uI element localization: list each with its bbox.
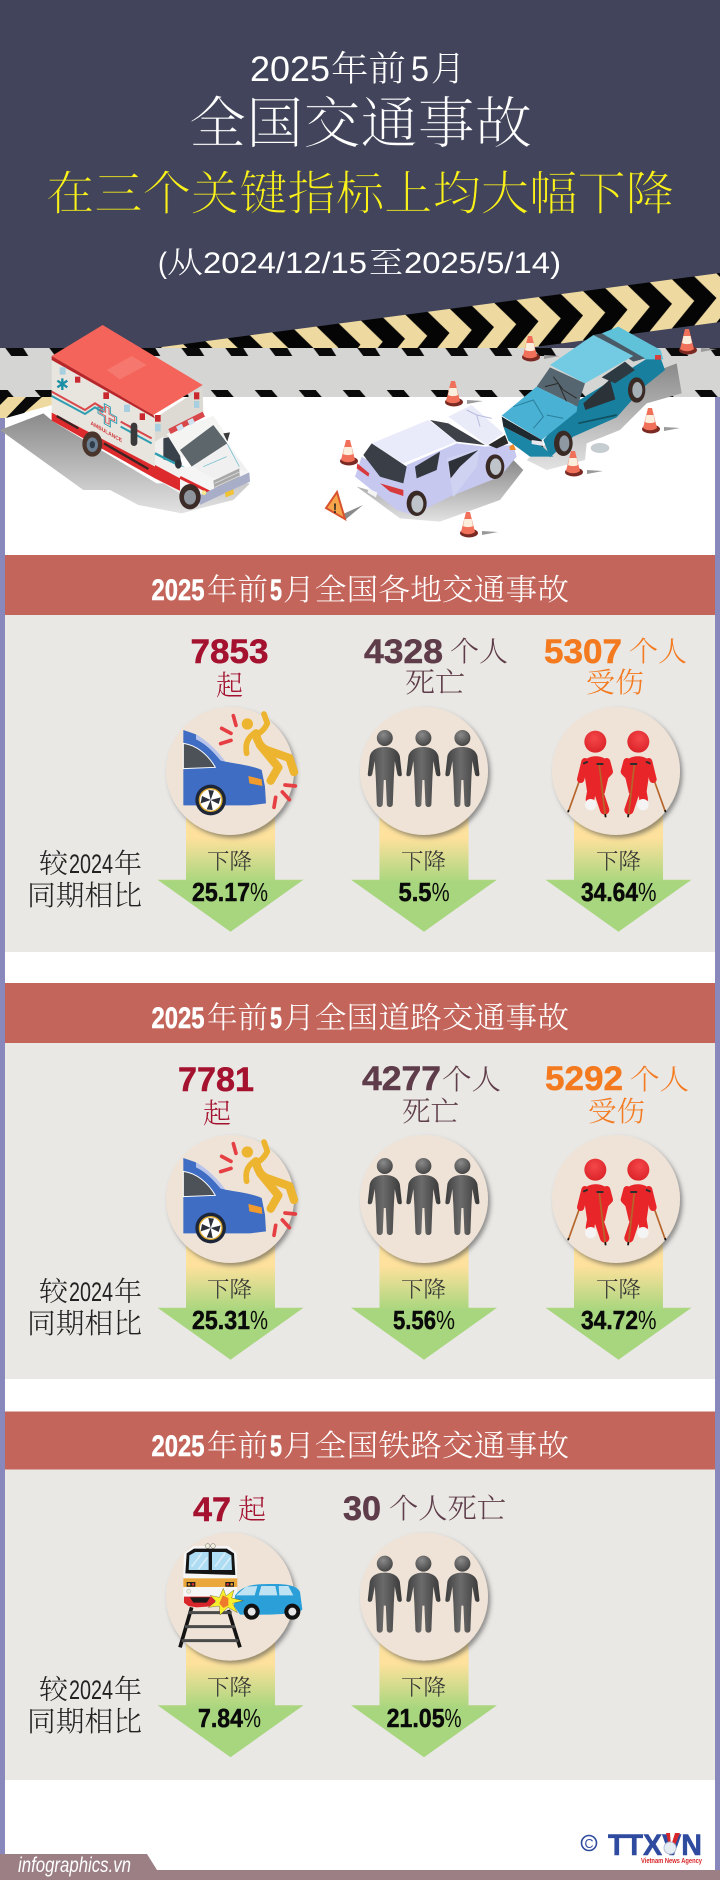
chevron warning band bbox=[147, 273, 720, 349]
panel background bbox=[5, 615, 715, 952]
section heading bar: 5 bbox=[270, 1002, 282, 1035]
title line: 2025年前5月: 年前 bbox=[331, 42, 406, 92]
comparison label: 2024 bbox=[69, 1675, 113, 1705]
comparison label: 年 bbox=[114, 842, 142, 881]
arrow: accidents down 7.84%: 7.84 bbox=[198, 1703, 243, 1733]
header background bbox=[0, 0, 720, 349]
stat: accidents 47: 47 bbox=[193, 1491, 231, 1529]
comparison label: 2024 bbox=[69, 849, 113, 879]
blue car bbox=[502, 327, 682, 470]
arrow: deaths down 21.05%: % bbox=[444, 1703, 462, 1733]
icon: train hitting car bbox=[166, 1533, 302, 1661]
arrow: deaths down 21.05%: 21.05 bbox=[387, 1703, 445, 1733]
arrow: deaths down 5.5%: 5.5 bbox=[398, 877, 432, 907]
comparison label: 同期相比 bbox=[27, 1700, 142, 1740]
panel background bbox=[5, 1041, 715, 1379]
section heading bar bbox=[5, 983, 715, 1043]
logo: TTXVN: Vietnam News Agency bbox=[641, 1858, 702, 1865]
footer ribbon bbox=[0, 1854, 720, 1880]
logo: TTXVN: TTXVN bbox=[608, 1829, 702, 1862]
comparison label: 2024 bbox=[69, 1277, 113, 1307]
arrow: deaths down 5.5% bbox=[351, 815, 497, 932]
arrow: accidents down 25.31%: 下降 bbox=[207, 1273, 252, 1304]
stat: deaths 4277: 个人 bbox=[442, 1058, 501, 1098]
stat: injured 5307 bbox=[544, 630, 687, 701]
comparison label: 年 bbox=[114, 1270, 142, 1309]
section heading bar: 年前 bbox=[207, 993, 268, 1037]
panel background bbox=[5, 1469, 715, 1780]
stat: deaths 4277: 死亡 bbox=[402, 1090, 459, 1130]
arrow: accidents down 25.17%: 下降 bbox=[207, 845, 252, 876]
white car bbox=[355, 405, 523, 522]
comparison label: 年 bbox=[114, 1668, 142, 1707]
stat: injured 5292: 受伤 bbox=[588, 1090, 645, 1130]
logo: TTXVN bbox=[582, 1829, 702, 1865]
title bbox=[46, 42, 674, 282]
icon: three people bbox=[360, 1135, 488, 1263]
date range: 2024/12/15 bbox=[203, 247, 367, 280]
arrow: injured down 34.64% bbox=[546, 815, 692, 932]
stat: accidents 7853 bbox=[190, 633, 268, 704]
icon: injured on crutches bbox=[552, 1135, 680, 1263]
illustration: cones on road bbox=[340, 329, 717, 466]
title line: 2025年前5月: 5 bbox=[411, 50, 429, 89]
section heading bar bbox=[5, 555, 715, 615]
stat: deaths 4328: 4328 bbox=[364, 633, 443, 671]
arrow: deaths down 5.56%: % bbox=[436, 1305, 455, 1335]
logo: TTXVN: C bbox=[584, 1836, 594, 1851]
title line: 全国交通事故: 全国交通事故 bbox=[189, 80, 532, 160]
icon: three people bbox=[360, 707, 488, 835]
arrow: deaths down 21.05% bbox=[351, 1640, 497, 1757]
stat: deaths 30: 30 bbox=[343, 1490, 381, 1528]
section heading bar: 年前 bbox=[207, 565, 268, 609]
section heading bar: 2025 bbox=[152, 1430, 204, 1463]
arrow: accidents down 25.31%: % bbox=[250, 1305, 268, 1335]
date range: ( bbox=[158, 247, 167, 280]
section 3 bbox=[5, 1412, 715, 1780]
section heading bar: 5 bbox=[270, 1430, 282, 1463]
stat: injured 5307: 个人 bbox=[629, 630, 687, 670]
arrow: deaths down 5.5%: 下降 bbox=[401, 845, 446, 876]
stat: accidents 47: 起 bbox=[238, 1488, 266, 1528]
date range: 至 bbox=[369, 238, 403, 282]
stat: accidents 7853: 起 bbox=[216, 664, 243, 704]
icon: warning triangle bbox=[326, 492, 363, 520]
arrow: injured down 34.72% bbox=[546, 1243, 692, 1360]
arrow: accidents down 7.84%: 下降 bbox=[207, 1671, 252, 1702]
arrow: accidents down 7.84%: % bbox=[243, 1703, 261, 1733]
icon: car hitting pedestrian bbox=[166, 707, 295, 835]
comparison label: 同期相比 bbox=[27, 1302, 142, 1342]
comparison label: 较 bbox=[39, 1270, 69, 1309]
stat: injured 5292 bbox=[545, 1058, 689, 1130]
arrow: accidents down 25.17%: 25.17 bbox=[192, 877, 250, 907]
arrow: injured down 34.72%: 下降 bbox=[596, 1273, 641, 1304]
comparison label: 较 bbox=[39, 842, 69, 881]
stat: deaths 4328: 死亡 bbox=[405, 661, 465, 701]
arrow: accidents down 7.84% bbox=[158, 1640, 304, 1757]
date range: 从 bbox=[167, 238, 203, 282]
stat: accidents 7853: 7853 bbox=[190, 633, 268, 671]
title line: 2025年前5月: 月 bbox=[431, 42, 465, 92]
arrow: accidents down 25.31% bbox=[158, 1243, 304, 1360]
comparison label bbox=[27, 842, 142, 914]
section 2 bbox=[5, 983, 715, 1379]
illustration: cones near cars bbox=[460, 451, 603, 538]
arrow: injured down 34.64%: % bbox=[638, 877, 656, 907]
stat: deaths 4328 bbox=[364, 630, 508, 701]
stat: injured 5307: 5307 bbox=[544, 633, 622, 671]
arrow: accidents down 25.17% bbox=[158, 815, 304, 932]
section heading bar: 2025 bbox=[152, 1002, 204, 1035]
road strip bbox=[0, 348, 720, 418]
title line: 2025年前5月: 2025 bbox=[250, 50, 330, 89]
section heading bar: 月全国道路交通事故 bbox=[283, 993, 569, 1037]
comparison label: 较 bbox=[39, 1668, 69, 1707]
arrow: injured down 34.64%: 34.64 bbox=[581, 877, 638, 907]
stat: deaths 30 bbox=[343, 1487, 506, 1528]
stat: accidents 7781 bbox=[178, 1061, 254, 1132]
section heading bar: 月全国铁路交通事故 bbox=[283, 1421, 569, 1465]
arrow: injured down 34.72%: % bbox=[638, 1305, 656, 1335]
footer ribbon: infographics.vn bbox=[18, 1854, 131, 1877]
section heading bar: 2025 bbox=[152, 574, 204, 607]
stat: deaths 4277: 4277 bbox=[362, 1060, 441, 1098]
stat: deaths 4277 bbox=[362, 1058, 501, 1130]
stat: accidents 7781: 起 bbox=[203, 1092, 231, 1132]
arrow: deaths down 5.5%: % bbox=[432, 877, 450, 907]
subtitle in yellow: 在三个关键指标上均大幅下降 bbox=[46, 157, 674, 224]
arrow: deaths down 5.56% bbox=[351, 1243, 497, 1360]
comparison label: 同期相比 bbox=[27, 874, 142, 914]
stat: injured 5307: 受伤 bbox=[586, 661, 644, 701]
arrow: deaths down 5.56%: 5.56 bbox=[393, 1305, 436, 1335]
arrow: deaths down 5.56%: 下降 bbox=[401, 1273, 446, 1304]
stat: accidents 47 bbox=[193, 1488, 266, 1529]
icon: injured on crutches bbox=[552, 707, 680, 835]
comparison label bbox=[27, 1270, 142, 1342]
stat: injured 5292: 个人 bbox=[630, 1058, 689, 1098]
side stripes bbox=[0, 397, 720, 1870]
icon: car hitting pedestrian bbox=[166, 1135, 295, 1263]
arrow: accidents down 25.31%: 25.31 bbox=[192, 1305, 250, 1335]
section 1 bbox=[5, 555, 715, 952]
section heading bar: 年前 bbox=[207, 1421, 268, 1465]
icon: three people bbox=[360, 1533, 488, 1661]
illustration: ambulance: AMBULANCE bbox=[91, 421, 122, 445]
arrow: deaths down 21.05%: 下降 bbox=[401, 1671, 446, 1702]
illustration: crashed cars bbox=[355, 327, 682, 522]
section heading bar bbox=[5, 1412, 715, 1470]
stat: deaths 4328: 个人 bbox=[450, 630, 508, 670]
date range: 2025/5/14) bbox=[404, 247, 561, 280]
arrow: accidents down 25.17%: % bbox=[250, 877, 268, 907]
comparison label bbox=[27, 1668, 142, 1740]
stat: injured 5292: 5292 bbox=[545, 1060, 623, 1098]
section heading bar: 5 bbox=[270, 574, 282, 607]
stat: accidents 7781: 7781 bbox=[178, 1061, 254, 1099]
icon: warning triangle: ! bbox=[333, 500, 337, 516]
arrow: injured down 34.72%: 34.72 bbox=[581, 1305, 638, 1335]
arrow: injured down 34.64%: 下降 bbox=[596, 845, 641, 876]
section heading bar: 月全国各地交通事故 bbox=[283, 565, 569, 609]
illustration: ambulance bbox=[0, 325, 250, 513]
stat: deaths 30: 个人死亡 bbox=[389, 1487, 506, 1527]
